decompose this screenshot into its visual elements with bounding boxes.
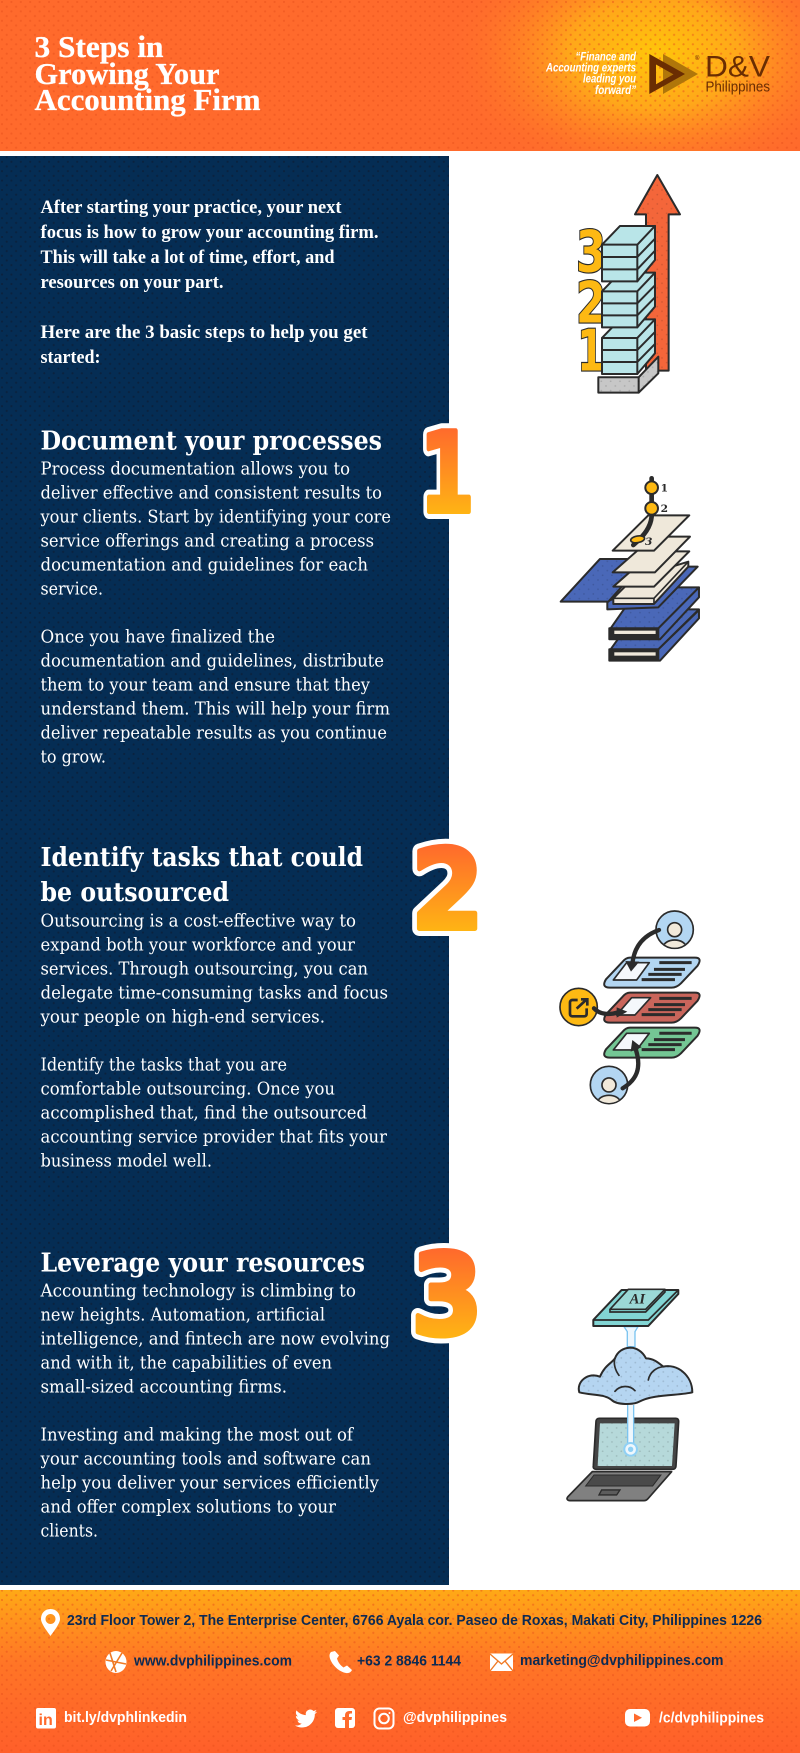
icon: phone	[330, 1651, 352, 1673]
process path with numbered pins	[630, 478, 668, 548]
step 2 body text: accomplished that, find the outsourced	[40, 1103, 367, 1124]
concrete base	[598, 357, 658, 393]
arrows	[594, 930, 659, 1088]
logo: D&V Philippines: D&V	[705, 51, 770, 84]
step 3 body text: Investing and making the most out of	[40, 1424, 354, 1445]
step 3 body text: help you deliver your services efficiently	[40, 1472, 380, 1493]
numbers 1 2 3: 3	[576, 220, 606, 286]
step 1 body text: understand them. This will help your firm	[40, 698, 390, 719]
step 1 body text: them to your team and ensure that they	[40, 674, 371, 695]
numbers 1 2 3: 2	[576, 270, 606, 336]
heading: step 3: Leverage your resources	[40, 1249, 365, 1279]
intro text: This will take a lot of time, effort, and	[40, 247, 335, 268]
address: 23rd Floor Tower 2, The Enterprise Center, 6766 Ayala cor. Paseo de Roxas, Makati City, Philippines 1226	[67, 1613, 762, 1629]
social: twitter, facebook, instagram: @dvphilippines	[403, 1710, 507, 1726]
step 1 body text: your clients. Start by identifying your core	[40, 506, 391, 527]
step 3 body text: clients.	[40, 1520, 98, 1541]
icon: instagram	[374, 1708, 394, 1728]
step 3 body text: new heights. Automation, artificial	[40, 1304, 325, 1325]
big number 3: 3	[411, 1230, 483, 1362]
block stack	[602, 226, 655, 374]
numbers 1 2 3: 1	[577, 319, 604, 385]
laptop	[567, 1418, 679, 1501]
panel: navy text column	[0, 156, 449, 1585]
address	[41, 1609, 762, 1636]
icon: red arrow	[635, 175, 680, 371]
card: blue	[604, 958, 700, 988]
open folder	[561, 559, 698, 609]
illustration: AI, cloud and laptop	[567, 1289, 692, 1501]
person top	[656, 911, 693, 955]
process path with numbered pins: 2	[661, 502, 668, 515]
heading: step 1: Document your processes	[40, 427, 382, 457]
step 2 body text	[40, 911, 388, 1172]
social: linkedin: bit.ly/dvphlinkedin	[64, 1710, 187, 1726]
intro text: After starting your practice, your next	[40, 197, 342, 218]
step 2 body text: delegate time-consuming tasks and focus	[40, 983, 388, 1004]
icon: linkedin	[36, 1708, 56, 1729]
step 3 body text: and offer complex solutions to your	[40, 1496, 336, 1517]
logo: D&V Philippines: ®	[695, 55, 700, 62]
step 2 body text: expand both your workforce and your	[40, 935, 355, 956]
step 3 body text: small-sized accounting firms.	[40, 1376, 287, 1397]
person bottom	[590, 1066, 628, 1110]
contact: email: marketing@dvphilippines.com	[520, 1653, 724, 1669]
intro text: resources on your part.	[40, 272, 224, 293]
title: Accounting Firm	[34, 82, 261, 117]
upper binder	[609, 587, 699, 639]
illustration: growth arrow and stacked blocks	[576, 175, 680, 393]
tagline: forward”	[595, 85, 636, 97]
step 2 body text: comfortable outsourcing. Once you	[40, 1079, 335, 1100]
process path with numbered pins: 1	[661, 482, 668, 495]
step 1 body text: Process documentation allows you to	[40, 458, 350, 479]
logo: D&V Philippines: Philippines	[706, 80, 770, 96]
connector with node	[624, 1405, 637, 1456]
contact: website: www.dvphilippines.com	[133, 1654, 292, 1670]
step 1 body text: documentation and guidelines for each	[40, 554, 368, 575]
step 3 body text: intelligence, and fintech are now evolving	[40, 1328, 390, 1349]
connector: chip to laptop	[624, 1327, 638, 1347]
logo: D&V Philippines	[649, 51, 770, 96]
step 2 body text: business model well.	[40, 1151, 212, 1172]
heading: step 2: Identify tasks that could	[40, 843, 363, 873]
big number 2: 2	[411, 826, 484, 956]
AI chip: AI	[629, 1291, 646, 1307]
step 3 body text	[40, 1280, 390, 1541]
intro text: focus is how to grow your accounting firm.	[40, 222, 378, 243]
big number 1: 1	[420, 410, 474, 538]
outsource icon	[560, 988, 597, 1026]
step 2 body text: your people on high-end services.	[40, 1007, 325, 1028]
icon: linkedin: in	[38, 1712, 53, 1729]
icon: facebook	[335, 1708, 355, 1728]
step 2 body text: Identify the tasks that you are	[40, 1055, 287, 1076]
step 1 body text: documentation and guidelines, distribute	[40, 650, 384, 671]
step 3 body text: and with it, the capabilities of even	[40, 1352, 332, 1373]
step 2 body text: services. Through outsourcing, you can	[40, 959, 368, 980]
title: Growing Your	[34, 56, 220, 91]
contact: phone: +63 2 8846 1144	[357, 1654, 461, 1670]
icon: envelope	[490, 1654, 513, 1671]
step 1 body text: Once you have finalized the	[40, 626, 275, 647]
big number 3: 3	[411, 1230, 483, 1362]
process path with numbered pins: 3	[645, 535, 652, 548]
heading: step 2	[40, 843, 363, 908]
AI chip	[593, 1289, 678, 1326]
step 3 body text: Accounting technology is climbing to	[40, 1280, 356, 1301]
illustration: documents and folders	[561, 478, 699, 661]
numbers 1 2 3	[576, 220, 606, 385]
step 2 body text: accounting service provider that fits your	[40, 1127, 387, 1148]
icon: location pin	[41, 1609, 60, 1636]
tagline: leading you	[583, 74, 636, 86]
step 1 body text: service offerings and creating a process	[40, 530, 374, 551]
title	[34, 29, 261, 117]
intro text: Here are the 3 basic steps to help you get	[40, 322, 368, 343]
big number 2: 2	[411, 826, 484, 956]
title: 3 Steps in	[34, 29, 164, 64]
tagline: “Finance and	[576, 52, 637, 64]
cloud	[579, 1348, 692, 1404]
intro text	[40, 197, 378, 368]
social: youtube: /c/dvphilippines	[659, 1710, 764, 1726]
contact: website	[106, 1651, 292, 1673]
lower binder	[609, 609, 699, 661]
icon: youtube	[625, 1709, 650, 1726]
icon: globe	[106, 1651, 126, 1673]
card: red	[604, 993, 700, 1023]
step 1 body text: deliver repeatable results as you continue	[40, 722, 387, 743]
header banner	[0, 0, 800, 151]
illustration: outsourcing task cards	[560, 911, 700, 1110]
step 2 body text: Outsourcing is a cost-effective way to	[40, 911, 356, 932]
step 1 body text: service.	[40, 578, 103, 599]
icon: twitter	[295, 1710, 317, 1728]
social: linkedin	[36, 1708, 187, 1729]
step 1 body text	[40, 458, 391, 767]
tagline: Accounting experts	[545, 63, 636, 75]
social: twitter, facebook, instagram	[295, 1708, 507, 1728]
big number 1: 1	[420, 410, 474, 538]
step 3 body text: your accounting tools and software can	[40, 1448, 371, 1469]
heading: step 2: be outsourced	[40, 878, 229, 908]
paper stack	[613, 515, 690, 604]
footer band	[0, 1590, 800, 1753]
intro text: started:	[40, 347, 100, 368]
social: youtube	[625, 1709, 764, 1726]
tagline	[545, 52, 637, 97]
card: green	[604, 1028, 700, 1058]
step 1 body text: to grow.	[40, 746, 106, 767]
contact: phone	[330, 1651, 461, 1673]
step 1 body text: deliver effective and consistent results to	[40, 482, 382, 503]
